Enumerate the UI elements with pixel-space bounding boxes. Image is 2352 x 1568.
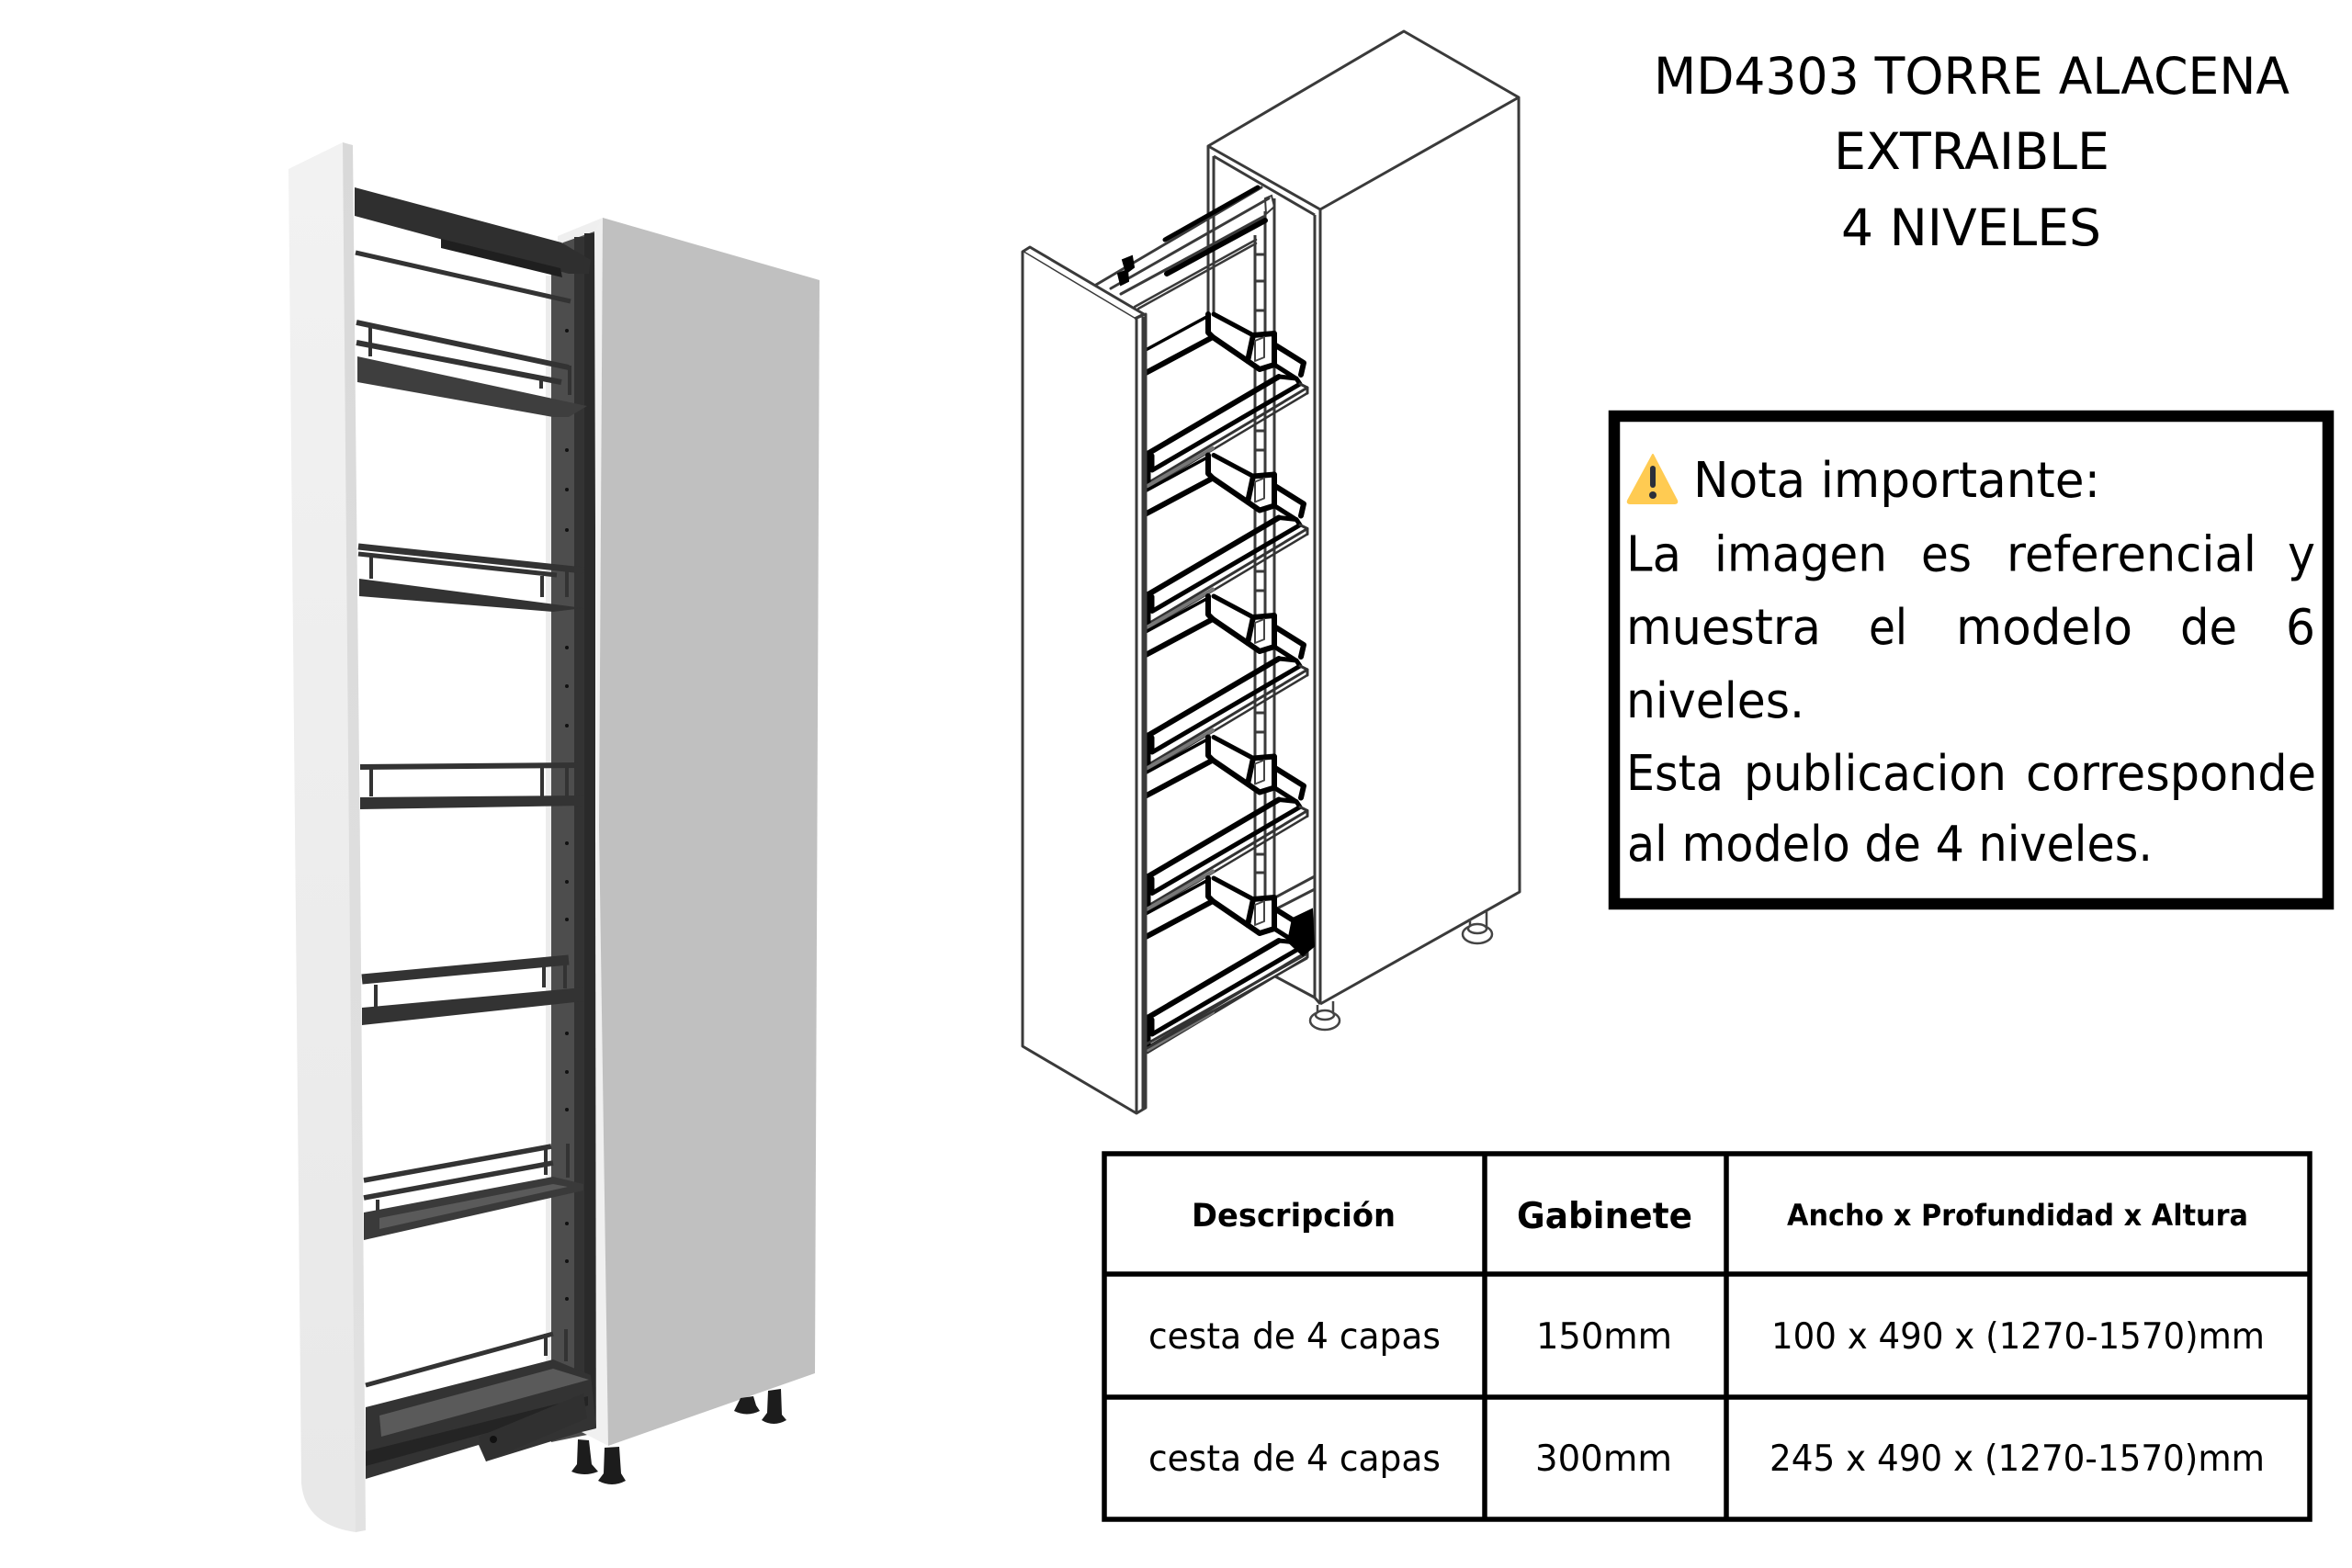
- cabinet front edge: [582, 218, 608, 1446]
- title: EXTRAIBLE: [1834, 122, 2109, 181]
- header row: Ancho x Profundidad x Altura: [1787, 1198, 2248, 1233]
- door panel: [1023, 247, 1146, 1113]
- table grid: [1104, 1154, 2310, 1519]
- title: MD4303 TORRE ALACENA: [1654, 47, 2290, 106]
- shelf 2: [358, 547, 583, 612]
- dark upright: [551, 231, 596, 1442]
- row 2: 245 x 490 x (1270-1570)mm: [1770, 1438, 2265, 1480]
- header row: Descripción: [1192, 1198, 1396, 1235]
- photo: pull-out pantry tower: [288, 142, 820, 1532]
- header row: [1192, 1196, 2248, 1237]
- shelf 6 and runner: [366, 1329, 596, 1479]
- front foot: [1310, 1001, 1340, 1030]
- note body: y: [2288, 525, 2315, 582]
- cabinet top panel: [558, 218, 606, 276]
- row 1: cesta de 4 capas: [1148, 1316, 1441, 1358]
- note body: modelo: [1956, 598, 2132, 656]
- note body: al modelo de 4 niveles.: [1627, 815, 2153, 873]
- note body: el: [1869, 598, 1907, 656]
- shelf 1: [356, 322, 587, 417]
- cabinet side: [599, 218, 820, 1446]
- shelf 4: [1146, 737, 1307, 911]
- bottom runner: [1146, 909, 1314, 1049]
- note body: es: [1921, 525, 1972, 582]
- note body: publicacion: [1744, 744, 2007, 802]
- row 1: 150mm: [1536, 1316, 1672, 1358]
- callout: nota importante: [1614, 416, 2328, 904]
- shelf 1: [1146, 314, 1307, 489]
- note body: La: [1626, 525, 1681, 582]
- note body: niveles.: [1626, 671, 1804, 729]
- row 1: [1148, 1316, 2265, 1358]
- back foot: [1463, 911, 1492, 943]
- ladder upright: [1255, 198, 1274, 919]
- title: [1654, 47, 2290, 257]
- shelf 3: [360, 764, 583, 809]
- note body: Esta: [1626, 744, 1724, 802]
- shelf 3: [1146, 596, 1307, 771]
- shelf 4: [362, 955, 583, 1025]
- dimensions table: [1104, 1154, 2310, 1519]
- header row: Gabinete: [1517, 1196, 1692, 1237]
- title: 4 NIVELES: [1841, 198, 2101, 257]
- shelf 5: [1146, 878, 1307, 1053]
- slide rails: [1096, 187, 1274, 309]
- shelf 2: [1146, 456, 1307, 630]
- door panel: [288, 142, 366, 1532]
- note body: 6: [2286, 598, 2315, 656]
- shelf 5: [364, 1144, 583, 1240]
- cabinet outline: [1208, 31, 1520, 1004]
- row 2: 300mm: [1535, 1438, 1672, 1480]
- shadow beside upright: [546, 276, 552, 1428]
- technical line drawing: [1023, 31, 1520, 1113]
- row 1: 100 x 490 x (1270-1570)mm: [1771, 1316, 2265, 1358]
- note body: imagen: [1714, 525, 1887, 582]
- note body: [1626, 525, 2316, 873]
- note body: de: [2180, 598, 2237, 656]
- note body: muestra: [1626, 598, 1821, 656]
- note heading: Nota importante:: [1693, 451, 2100, 509]
- icon: warning triangle: [1628, 455, 1677, 503]
- row 2: [1148, 1438, 2265, 1480]
- note body: referencial: [2007, 525, 2256, 582]
- callout frame: [1614, 416, 2328, 904]
- top rail: [355, 187, 591, 301]
- cabinet legs: [571, 1389, 786, 1484]
- row 2: cesta de 4 capas: [1148, 1438, 1441, 1480]
- note body: corresponde: [2026, 744, 2316, 802]
